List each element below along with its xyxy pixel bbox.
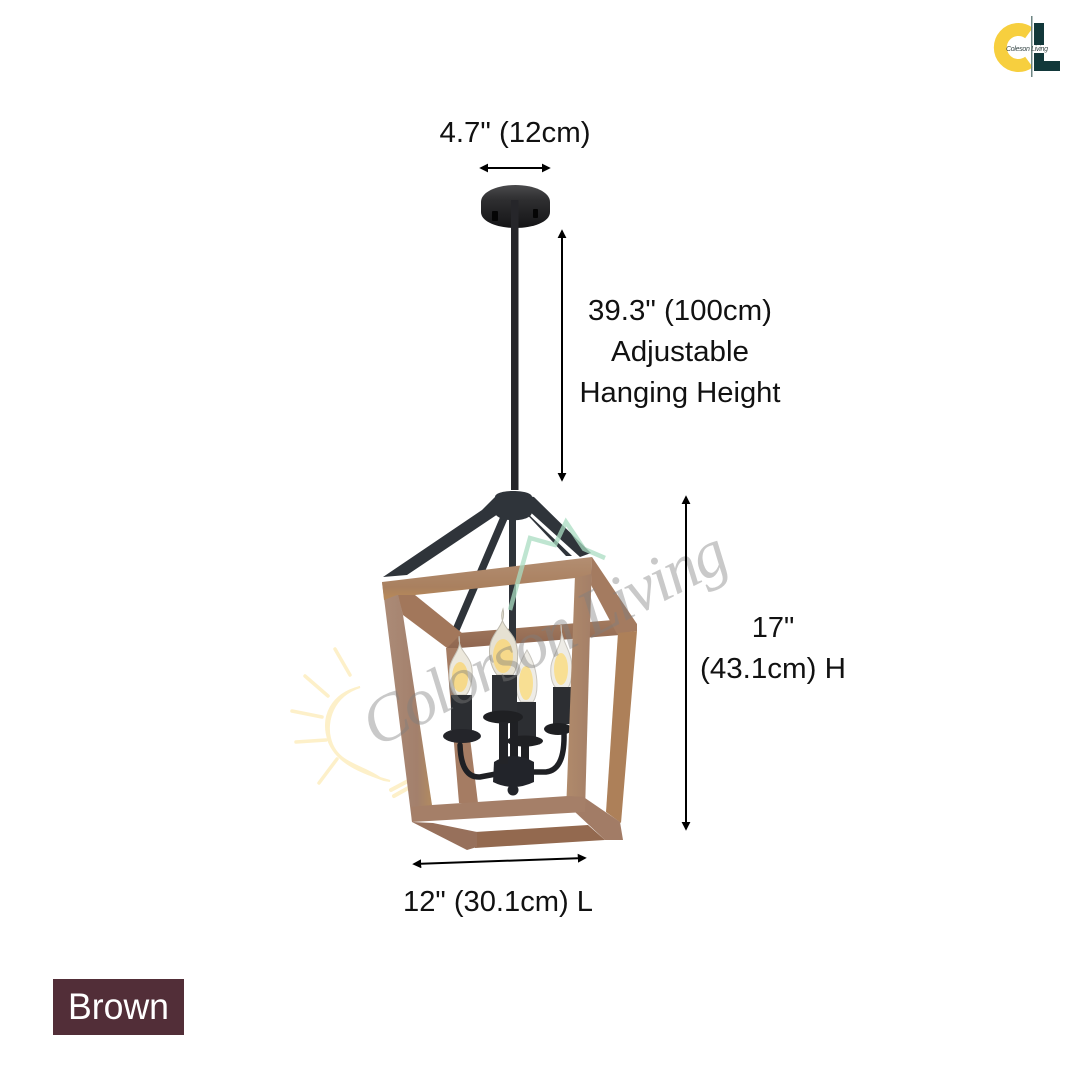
front frame top rail (382, 557, 592, 600)
dimension: hanging height: 39.3" (100cm) (588, 295, 772, 327)
watermark: script text: Colorson Living (350, 515, 739, 761)
left candle (443, 636, 481, 743)
colour tag: Brown (53, 979, 184, 1035)
back centre candle (507, 650, 543, 765)
dimension: lantern height: (43.1cm) H (700, 653, 846, 685)
arms (460, 722, 564, 777)
hanging rod (511, 200, 518, 490)
right bottom rail (575, 798, 623, 840)
left side top rail (397, 593, 462, 648)
brand logo (1000, 16, 1060, 77)
chandelier arms and candles (443, 609, 572, 796)
dimension: lantern height (686, 497, 846, 829)
dimension: lantern length (403, 858, 593, 918)
front frame bottom rail (411, 796, 585, 822)
pendant lantern (382, 185, 637, 850)
ceiling canopy (481, 185, 550, 228)
black upper cage bars (383, 491, 591, 643)
back wood bar (447, 620, 620, 649)
right back post (606, 631, 637, 823)
dimension: lantern height: 17" (752, 612, 794, 644)
watermark: green roof mark (510, 522, 605, 610)
right side top rail (591, 557, 637, 634)
dimension: hanging height (562, 231, 780, 480)
dimension: hanging height: Hanging Height (580, 377, 780, 409)
hub (493, 756, 534, 796)
watermark: light bulb (292, 649, 410, 796)
front candle (483, 609, 523, 764)
back right candle (544, 625, 572, 735)
back bottom frame (475, 825, 605, 848)
back left post (446, 648, 478, 803)
front frame right post (566, 557, 592, 812)
brand logo: Coleson Living (1006, 46, 1048, 53)
front frame left post (382, 582, 432, 822)
dimension: canopy width: 4.7" (12cm) (440, 117, 590, 149)
dimension: hanging height: Adjustable (611, 336, 749, 368)
dimension: lantern length: 12" (30.1cm) L (403, 886, 593, 918)
colour tag: Brown: Brown (68, 986, 169, 1027)
